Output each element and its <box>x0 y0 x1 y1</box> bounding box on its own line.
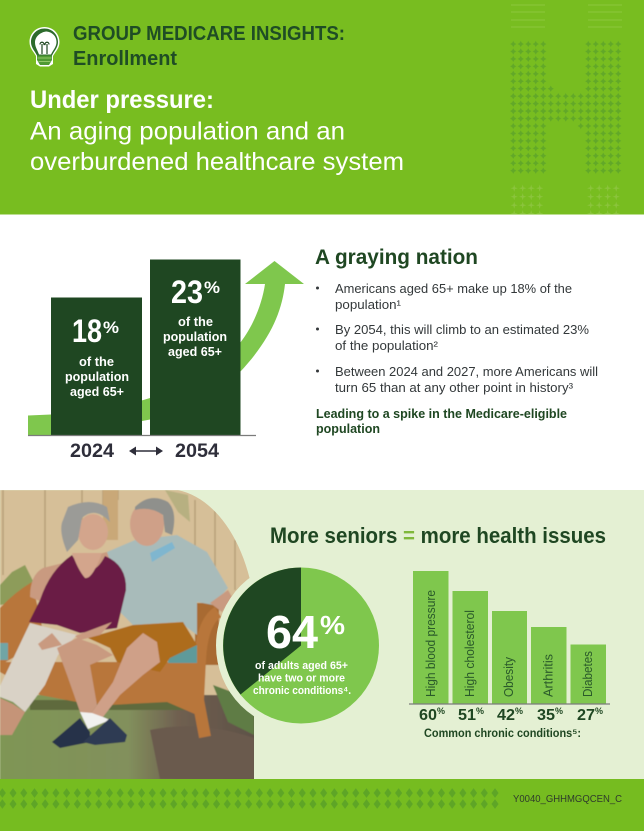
year label: 2024: 2024 <box>70 441 114 462</box>
bar: diabetes: 27 <box>577 707 595 724</box>
bullet list: Between 2024 and 2027, more Americans will <box>335 364 598 379</box>
pie chart: 64 percent: % <box>320 610 345 640</box>
decorative H dot pattern <box>510 5 622 214</box>
wicker bench <box>0 582 219 737</box>
bar: obesity: 42 <box>497 707 515 724</box>
arrow: rising trend <box>28 261 304 436</box>
bar: high blood pressure <box>413 571 448 724</box>
pie chart: 64 percent: chronic conditions⁴. <box>253 685 351 697</box>
bar: 2054: population <box>163 329 227 344</box>
chart caption: Common chronic conditions⁵: <box>424 726 581 740</box>
pie chart: 64 percent <box>216 560 386 730</box>
bar: 2054: of the <box>178 314 213 329</box>
bar: arthritis: Arthritis <box>540 654 556 697</box>
bar: obesity <box>492 611 527 724</box>
heading: More seniors = more health issues <box>270 523 606 548</box>
arrow: between years <box>129 446 163 456</box>
bar: high blood pressure: High blood pressure <box>423 590 438 697</box>
bullet list: of the population² <box>335 338 439 353</box>
bar: 2024: population <box>65 369 129 384</box>
bullet list: By 2054, this will climb to an estimated 23% <box>335 322 589 337</box>
header eyebrow: GROUP MEDICARE INSIGHTS: <box>73 23 345 45</box>
heading: A graying nation <box>315 246 478 269</box>
bullet list: Americans aged 65+ make up 18% of the <box>335 281 572 296</box>
photo: senior couple on wicker bench <box>0 490 256 780</box>
panel: graying nation chart <box>28 260 304 462</box>
woman <box>0 502 126 735</box>
bar: high blood pressure: 60 <box>419 707 437 724</box>
panel: health issues background <box>0 490 644 779</box>
header eyebrow: Enrollment <box>73 48 177 70</box>
bullet list: turn 65 than at any other point in history³ <box>335 380 574 395</box>
bar: diabetes <box>570 644 606 724</box>
bar: 2024: aged 65+ <box>70 384 124 399</box>
takeaway <box>316 406 567 436</box>
bar: 2054: aged 65+ <box>168 344 222 359</box>
title: An aging population and an <box>30 118 345 146</box>
man legs <box>52 622 197 748</box>
icon: lightbulb <box>30 27 60 66</box>
man torso <box>0 498 232 663</box>
bullet list <box>316 281 598 395</box>
bar: high cholesterol: High cholesterol <box>462 610 477 697</box>
title: Under pressure: <box>30 86 214 114</box>
header band <box>0 0 644 214</box>
bar: 2024: % <box>103 318 119 337</box>
bar: arthritis: % <box>555 706 563 716</box>
title: overburdened healthcare system <box>30 148 404 176</box>
title <box>30 86 404 176</box>
document code: Y0040_GHHMGQCEN_C <box>513 793 622 805</box>
bar chart: common chronic conditions <box>409 571 610 740</box>
bar: 2054 <box>150 260 240 436</box>
bar: arthritis <box>531 627 566 724</box>
bar: 2054: 23 <box>171 274 203 310</box>
bullet list: population¹ <box>335 297 402 312</box>
bar: diabetes: % <box>595 706 603 716</box>
bar: high blood pressure: % <box>437 706 445 716</box>
takeaway: Leading to a spike in the Medicare-eligible <box>316 406 567 421</box>
bar: arthritis: 35 <box>537 707 555 724</box>
bar: 2024: 18 <box>72 313 102 349</box>
footer band <box>0 779 644 831</box>
bar: high cholesterol: % <box>476 706 484 716</box>
pie chart: 64 percent: of adults aged 65+ <box>255 660 348 672</box>
bar: high cholesterol <box>452 591 488 724</box>
year label: 2054: 2054 <box>175 441 219 462</box>
bar: high cholesterol: 51 <box>458 707 476 724</box>
bar: obesity: Obesity <box>501 657 516 697</box>
bar: 2024 <box>51 298 142 436</box>
header eyebrow <box>73 23 345 70</box>
bar: 2054: % <box>204 278 220 297</box>
pie chart: 64 percent: have two or more <box>258 672 345 684</box>
bar: obesity: % <box>515 706 523 716</box>
bar: 2024: of the <box>79 354 114 369</box>
woman hands <box>38 622 112 650</box>
bar: diabetes: Diabetes <box>580 651 595 697</box>
panel: health issues <box>216 523 610 740</box>
pie chart: 64 percent: 64 <box>266 606 318 658</box>
takeaway: population <box>316 421 380 436</box>
panel: graying nation text <box>315 246 598 436</box>
